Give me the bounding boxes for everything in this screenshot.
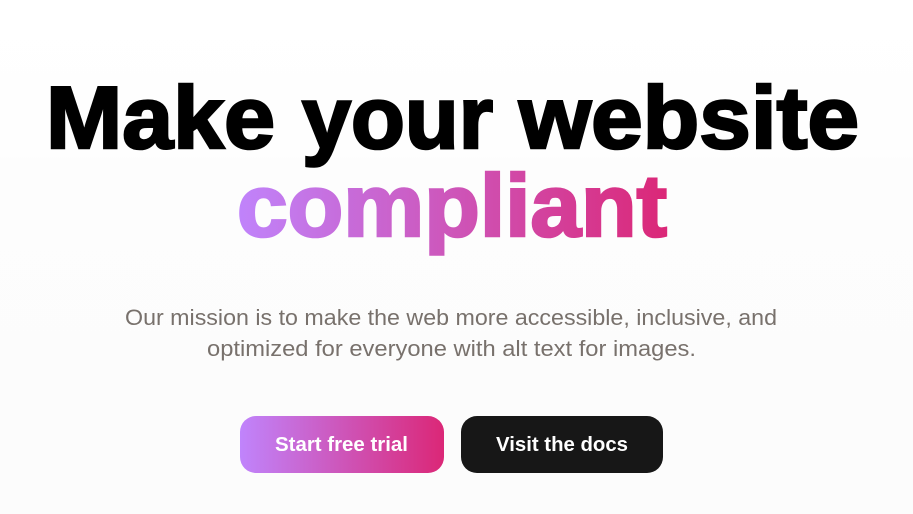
title line: Make your website xyxy=(46,68,859,167)
title line: Make your website: website xyxy=(518,68,859,167)
button: start free trial xyxy=(240,416,444,473)
title line: Make your website: your xyxy=(302,68,493,167)
mission text: optimized for everyone with alt text for images. xyxy=(207,336,696,361)
mission text xyxy=(125,305,777,361)
button: start free trial: Start free trial xyxy=(275,434,408,456)
button: visit the docs xyxy=(461,416,663,473)
title xyxy=(46,68,859,255)
button: visit the docs: Visit the docs xyxy=(496,434,628,456)
title line: compliant: compliant xyxy=(237,156,667,255)
mission text: Our mission is to make the web more accessible, inclusive, and xyxy=(125,305,777,330)
title line: Make your website: Make xyxy=(46,68,275,167)
